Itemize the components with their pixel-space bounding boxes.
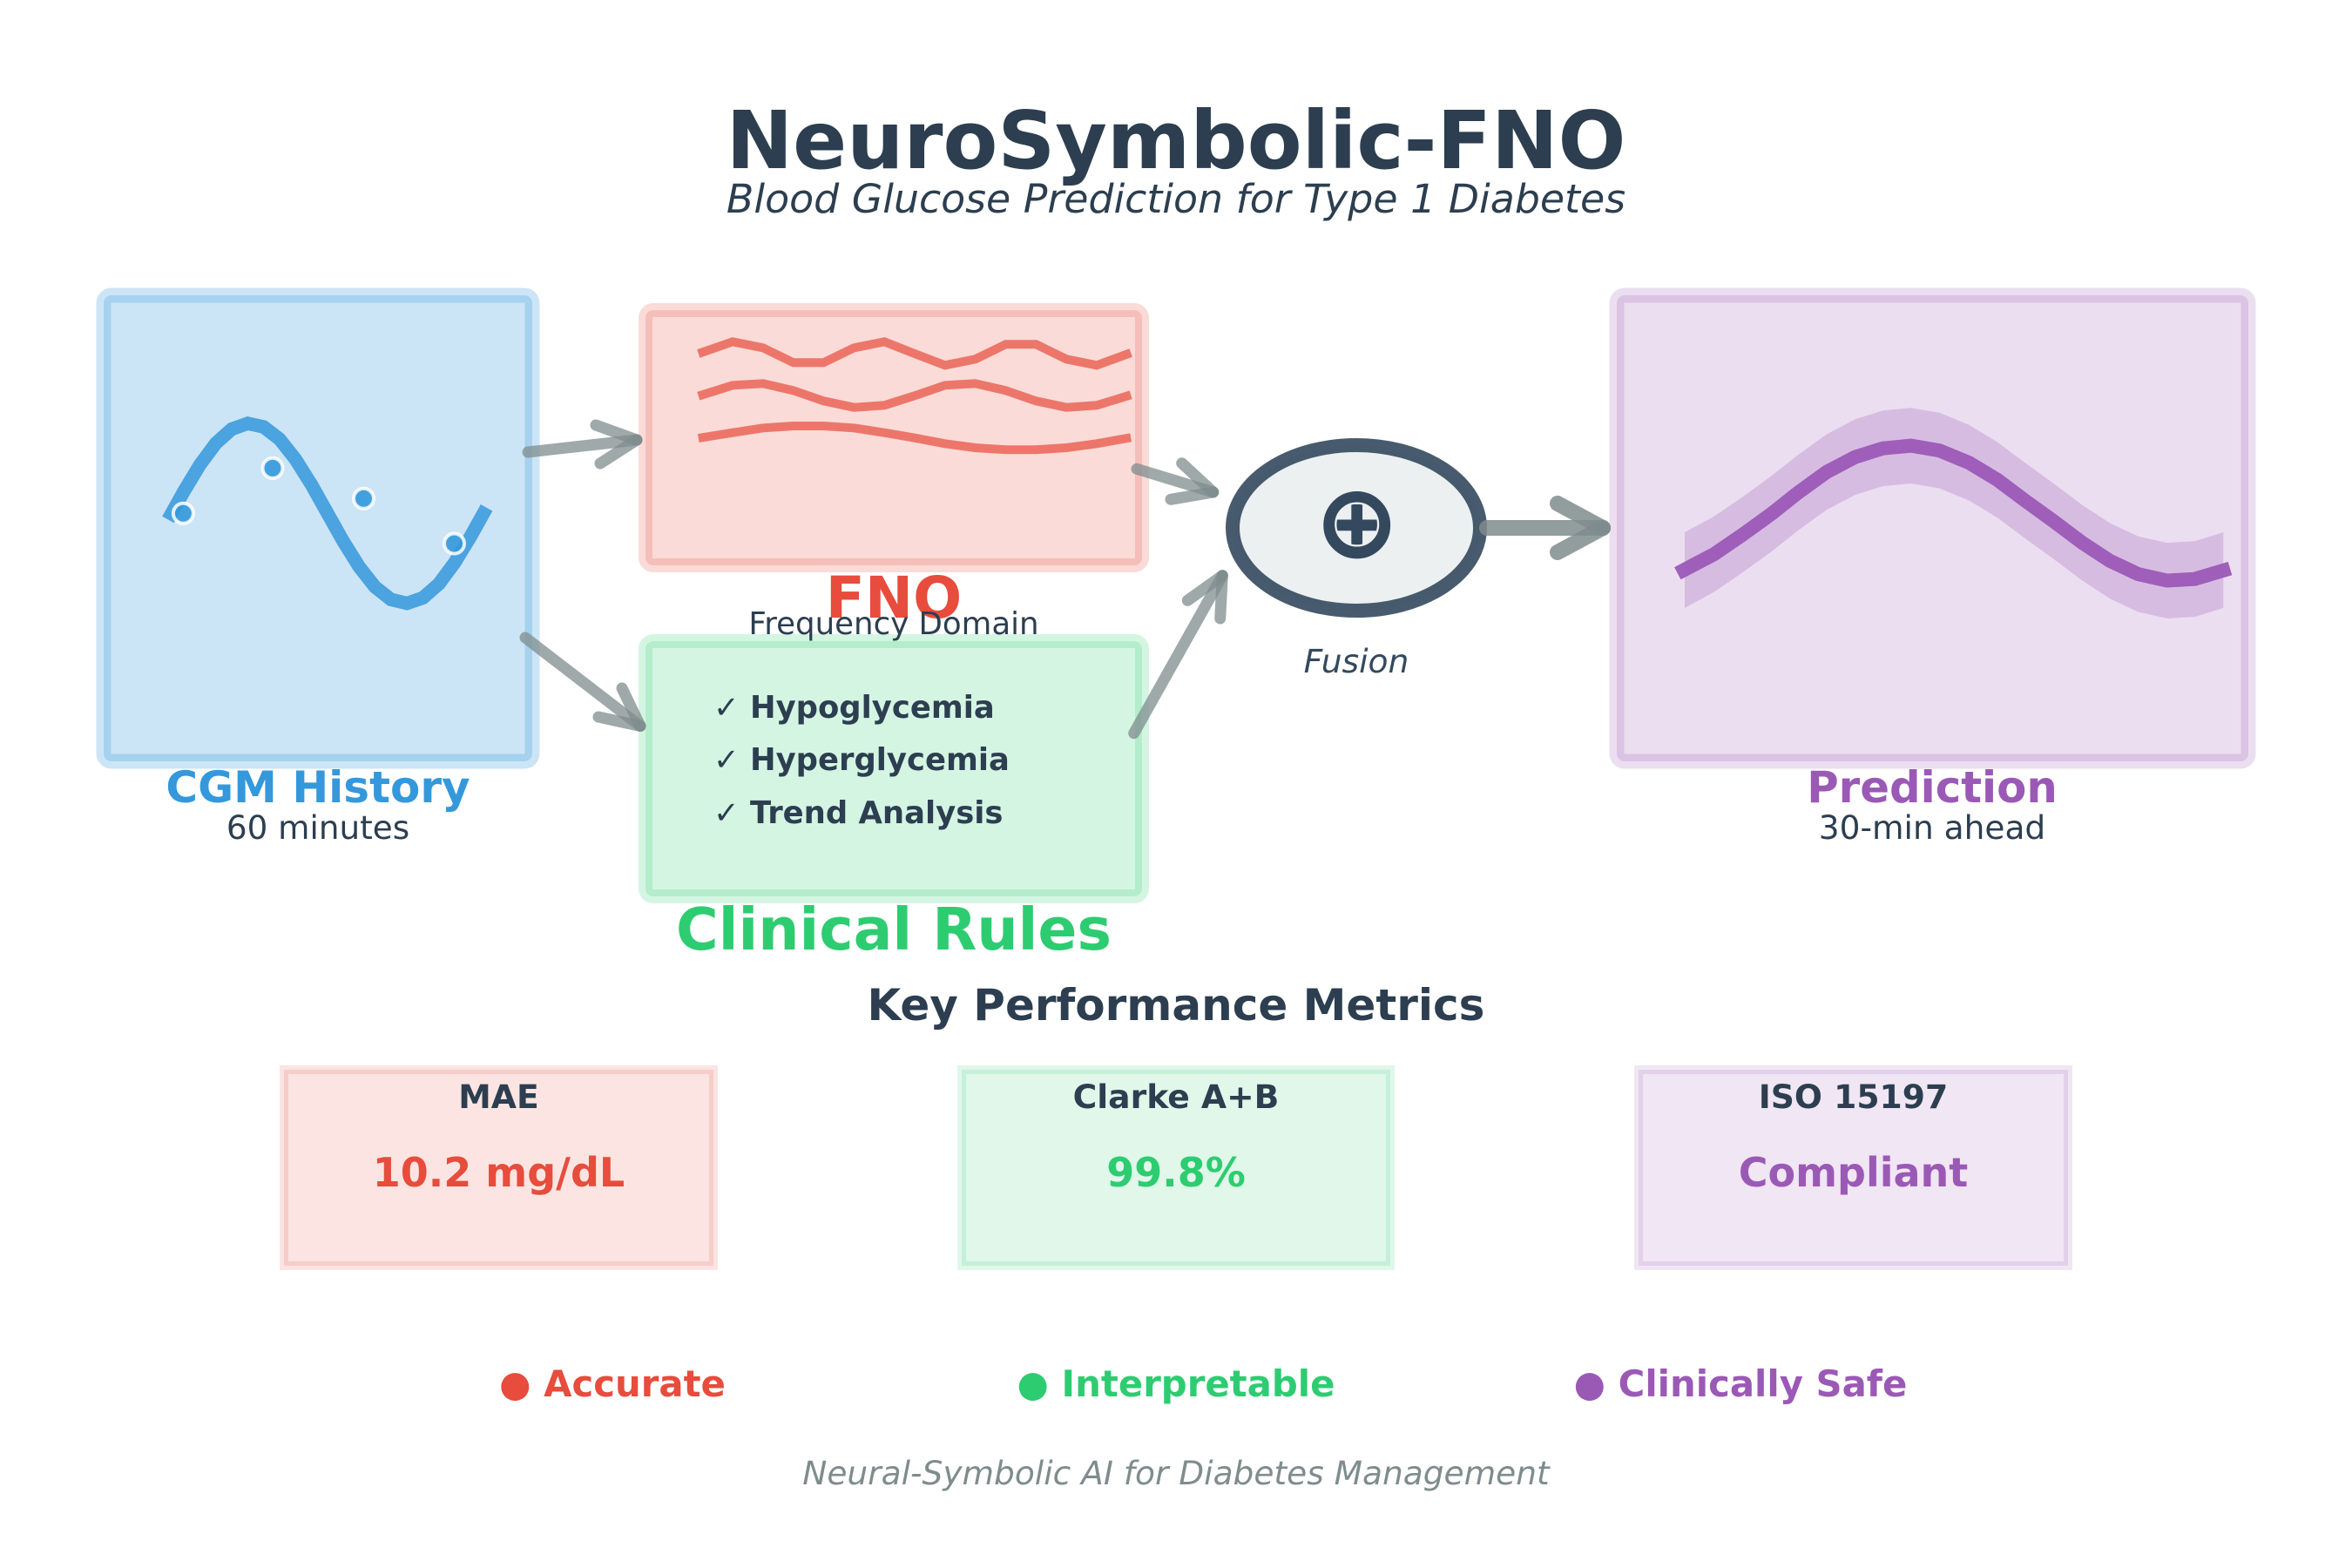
legend: accurate: ● Accurate [499, 1362, 726, 1405]
panel box: FNO [645, 310, 1142, 565]
footer: Neural-Symbolic AI for Diabetes Management [802, 1454, 1551, 1492]
frequency waves [699, 341, 1131, 449]
metric value: 99.8% [1106, 1149, 1246, 1196]
card box [962, 1070, 1390, 1266]
sublabel: 30-min ahead: 30-min ahead [1819, 808, 2045, 847]
sublabel: Frequency Domain: Frequency Domain [748, 606, 1039, 642]
heading: key performance metrics: Key Performance Metrics [868, 980, 1484, 1031]
arrow: FNO to fusion [1137, 463, 1213, 499]
card box [1639, 1070, 2068, 1266]
glucose curve [168, 423, 487, 604]
CGM sample points [173, 458, 464, 554]
metric name: ISO 15197 [1759, 1078, 1948, 1116]
metric card: MAE [284, 1070, 713, 1266]
rule list [713, 690, 1010, 831]
panel: CGM history [104, 295, 532, 761]
rule list: ✓ Trend Analysis [713, 795, 1003, 831]
arrow: CGM to rules [525, 638, 640, 727]
label: Prediction: Prediction [1807, 762, 2058, 813]
panel box: CGM [104, 295, 532, 761]
label: FNO: FNO [826, 564, 962, 632]
metric name: Clarke A+B [1073, 1078, 1279, 1116]
arrow: fusion to prediction [1487, 504, 1603, 552]
metric value: 10.2 mg/dL [373, 1149, 625, 1196]
fusion ellipse [1233, 445, 1480, 611]
panel: clinical rules [645, 641, 1142, 896]
card box [284, 1070, 713, 1266]
panel box: rules [645, 641, 1142, 896]
panel box: prediction [1617, 295, 2248, 761]
panel: prediction [1617, 295, 2248, 761]
predicted curve [1678, 446, 2230, 580]
sublabel: 60 minutes: 60 minutes [226, 808, 409, 847]
arrow: rules to fusion [1134, 576, 1222, 733]
fusion symbol: ⊕ [1315, 464, 1399, 581]
label: Clinical Rules: Clinical Rules [676, 896, 1112, 963]
fusion node [1233, 445, 1480, 611]
metric name: MAE [458, 1078, 539, 1116]
subtitle: Blood Glucose Prediction for Type 1 Diabetes [727, 175, 1625, 222]
metric card: Clarke [962, 1070, 1390, 1266]
confidence band [1685, 408, 2223, 618]
label: Fusion: Fusion [1304, 642, 1409, 680]
rule list: ✓ Hyperglycemia [713, 742, 1010, 778]
metric value: Compliant [1739, 1149, 1968, 1196]
legend: interpretable: ● Interpretable [1017, 1362, 1335, 1405]
label: CGM History: CGM History [166, 762, 470, 813]
metric card: ISO [1639, 1070, 2068, 1266]
legend: clinically safe: ● Clinically Safe [1574, 1362, 1907, 1405]
title: NeuroSymbolic-FNO [727, 94, 1625, 187]
rule list: ✓ Hypoglycemia [713, 690, 995, 726]
panel: FNO [645, 310, 1142, 565]
arrow: CGM to FNO [528, 425, 637, 463]
